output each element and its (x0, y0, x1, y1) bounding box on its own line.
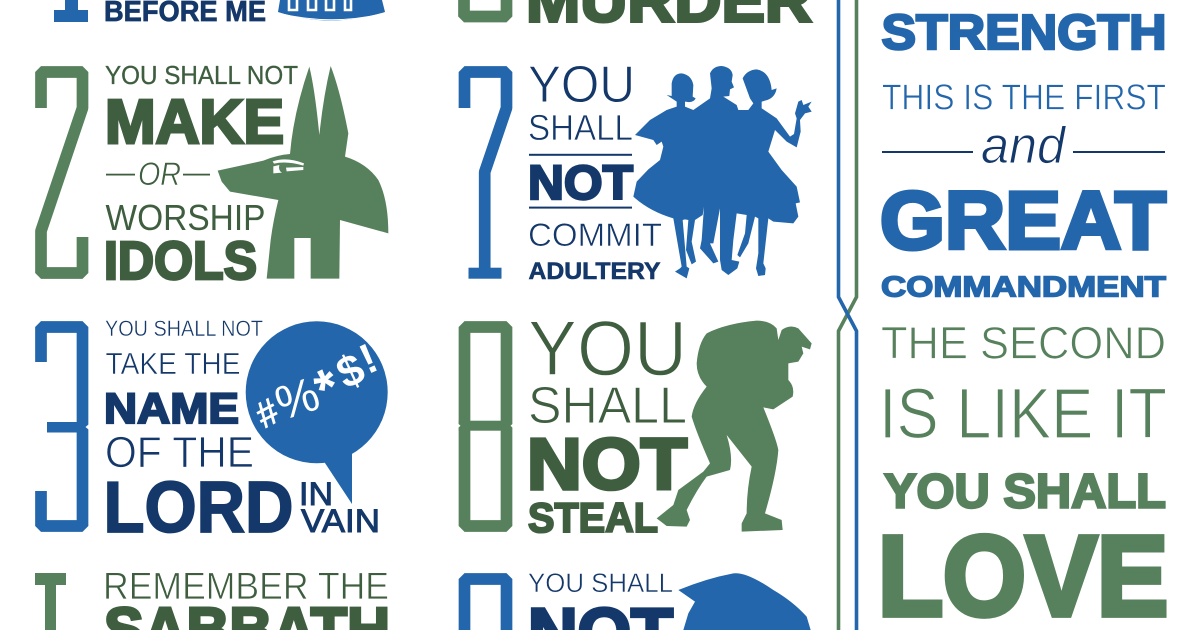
text: remember the: REMEMBER THE (103, 566, 389, 608)
numeral 3 (41, 327, 88, 526)
text: or with rules (106, 156, 210, 192)
text: not: NOT (528, 157, 633, 210)
icon: speech bubble (246, 321, 388, 504)
panel: commandment 9 (464, 568, 811, 630)
panel: commandment 7 (464, 56, 812, 285)
text: in: IN (299, 476, 333, 512)
text: strength: STRENGTH (882, 6, 1166, 60)
text: take the: TAKE THE (106, 347, 240, 381)
panel: commandment 4 (35, 566, 390, 630)
text: steal: STEAL (528, 494, 658, 541)
text: you shall not: YOU SHALL NOT (105, 316, 263, 341)
panel: commandment 6 (464, 0, 812, 34)
text: the second: THE SECOND (881, 318, 1166, 368)
text: idols: IDOLS (104, 231, 257, 291)
text: of the: OF THE (105, 428, 254, 477)
icon: anubis head (218, 66, 388, 279)
text: shall: SHALL (528, 107, 633, 148)
icon: speech bubble: # (248, 390, 287, 437)
text: shall: SHALL (528, 377, 687, 435)
text: you shall: YOU SHALL (528, 568, 673, 598)
panel: commandment 2 (41, 62, 388, 291)
text: name: NAME (104, 385, 239, 433)
icon: speech bubble: % (269, 368, 326, 431)
numeral 9 (464, 579, 506, 630)
numeral 1 (54, 0, 88, 22)
divider: crossing lines (838, 0, 856, 630)
text: great: GREAT (880, 176, 1166, 266)
numeral 8 (458, 327, 513, 526)
icon: head silhouette (678, 573, 811, 630)
text: you: YOU (528, 304, 687, 392)
icon: three dancing figures (633, 66, 812, 278)
text: you shall: YOU SHALL (884, 466, 1166, 518)
text: commandment: COMMANDMENT (881, 272, 1166, 304)
numeral 4 (35, 573, 66, 630)
panel: commandment 3 (41, 316, 388, 548)
text: vain: VAIN (301, 503, 380, 539)
text: not: NOT (527, 425, 687, 505)
text: or with rules: OR (138, 156, 181, 192)
rule (529, 154, 632, 156)
text: you: YOU (528, 56, 635, 114)
icon: speech bubble: ! (352, 334, 384, 383)
icon: speech bubble: * (305, 355, 351, 420)
text: and with rules: and (981, 117, 1067, 175)
rule (529, 207, 632, 209)
text: lord: LORD (104, 468, 294, 548)
text: adultery: ADULTERY (528, 258, 660, 285)
numeral 6 (464, 0, 506, 16)
text: you shall not: YOU SHALL NOT (105, 62, 298, 90)
text: commit: COMMIT (528, 217, 662, 253)
icon: pedestal (278, 0, 385, 20)
panel: great commandment (878, 6, 1168, 630)
text: is like it: IS LIKE IT (879, 375, 1167, 454)
icon: speech bubble: $ (329, 344, 372, 399)
numeral 2 (41, 72, 82, 273)
panel: commandment 8 (458, 304, 812, 541)
numeral 7 (464, 72, 506, 279)
text: make: MAKE (105, 88, 284, 157)
panel: commandment 1 (54, 0, 385, 28)
icon: thief carrying sack (657, 321, 812, 532)
text: this is the first: THIS IS THE FIRST (882, 76, 1166, 118)
text: worship: WORSHIP (106, 197, 266, 238)
